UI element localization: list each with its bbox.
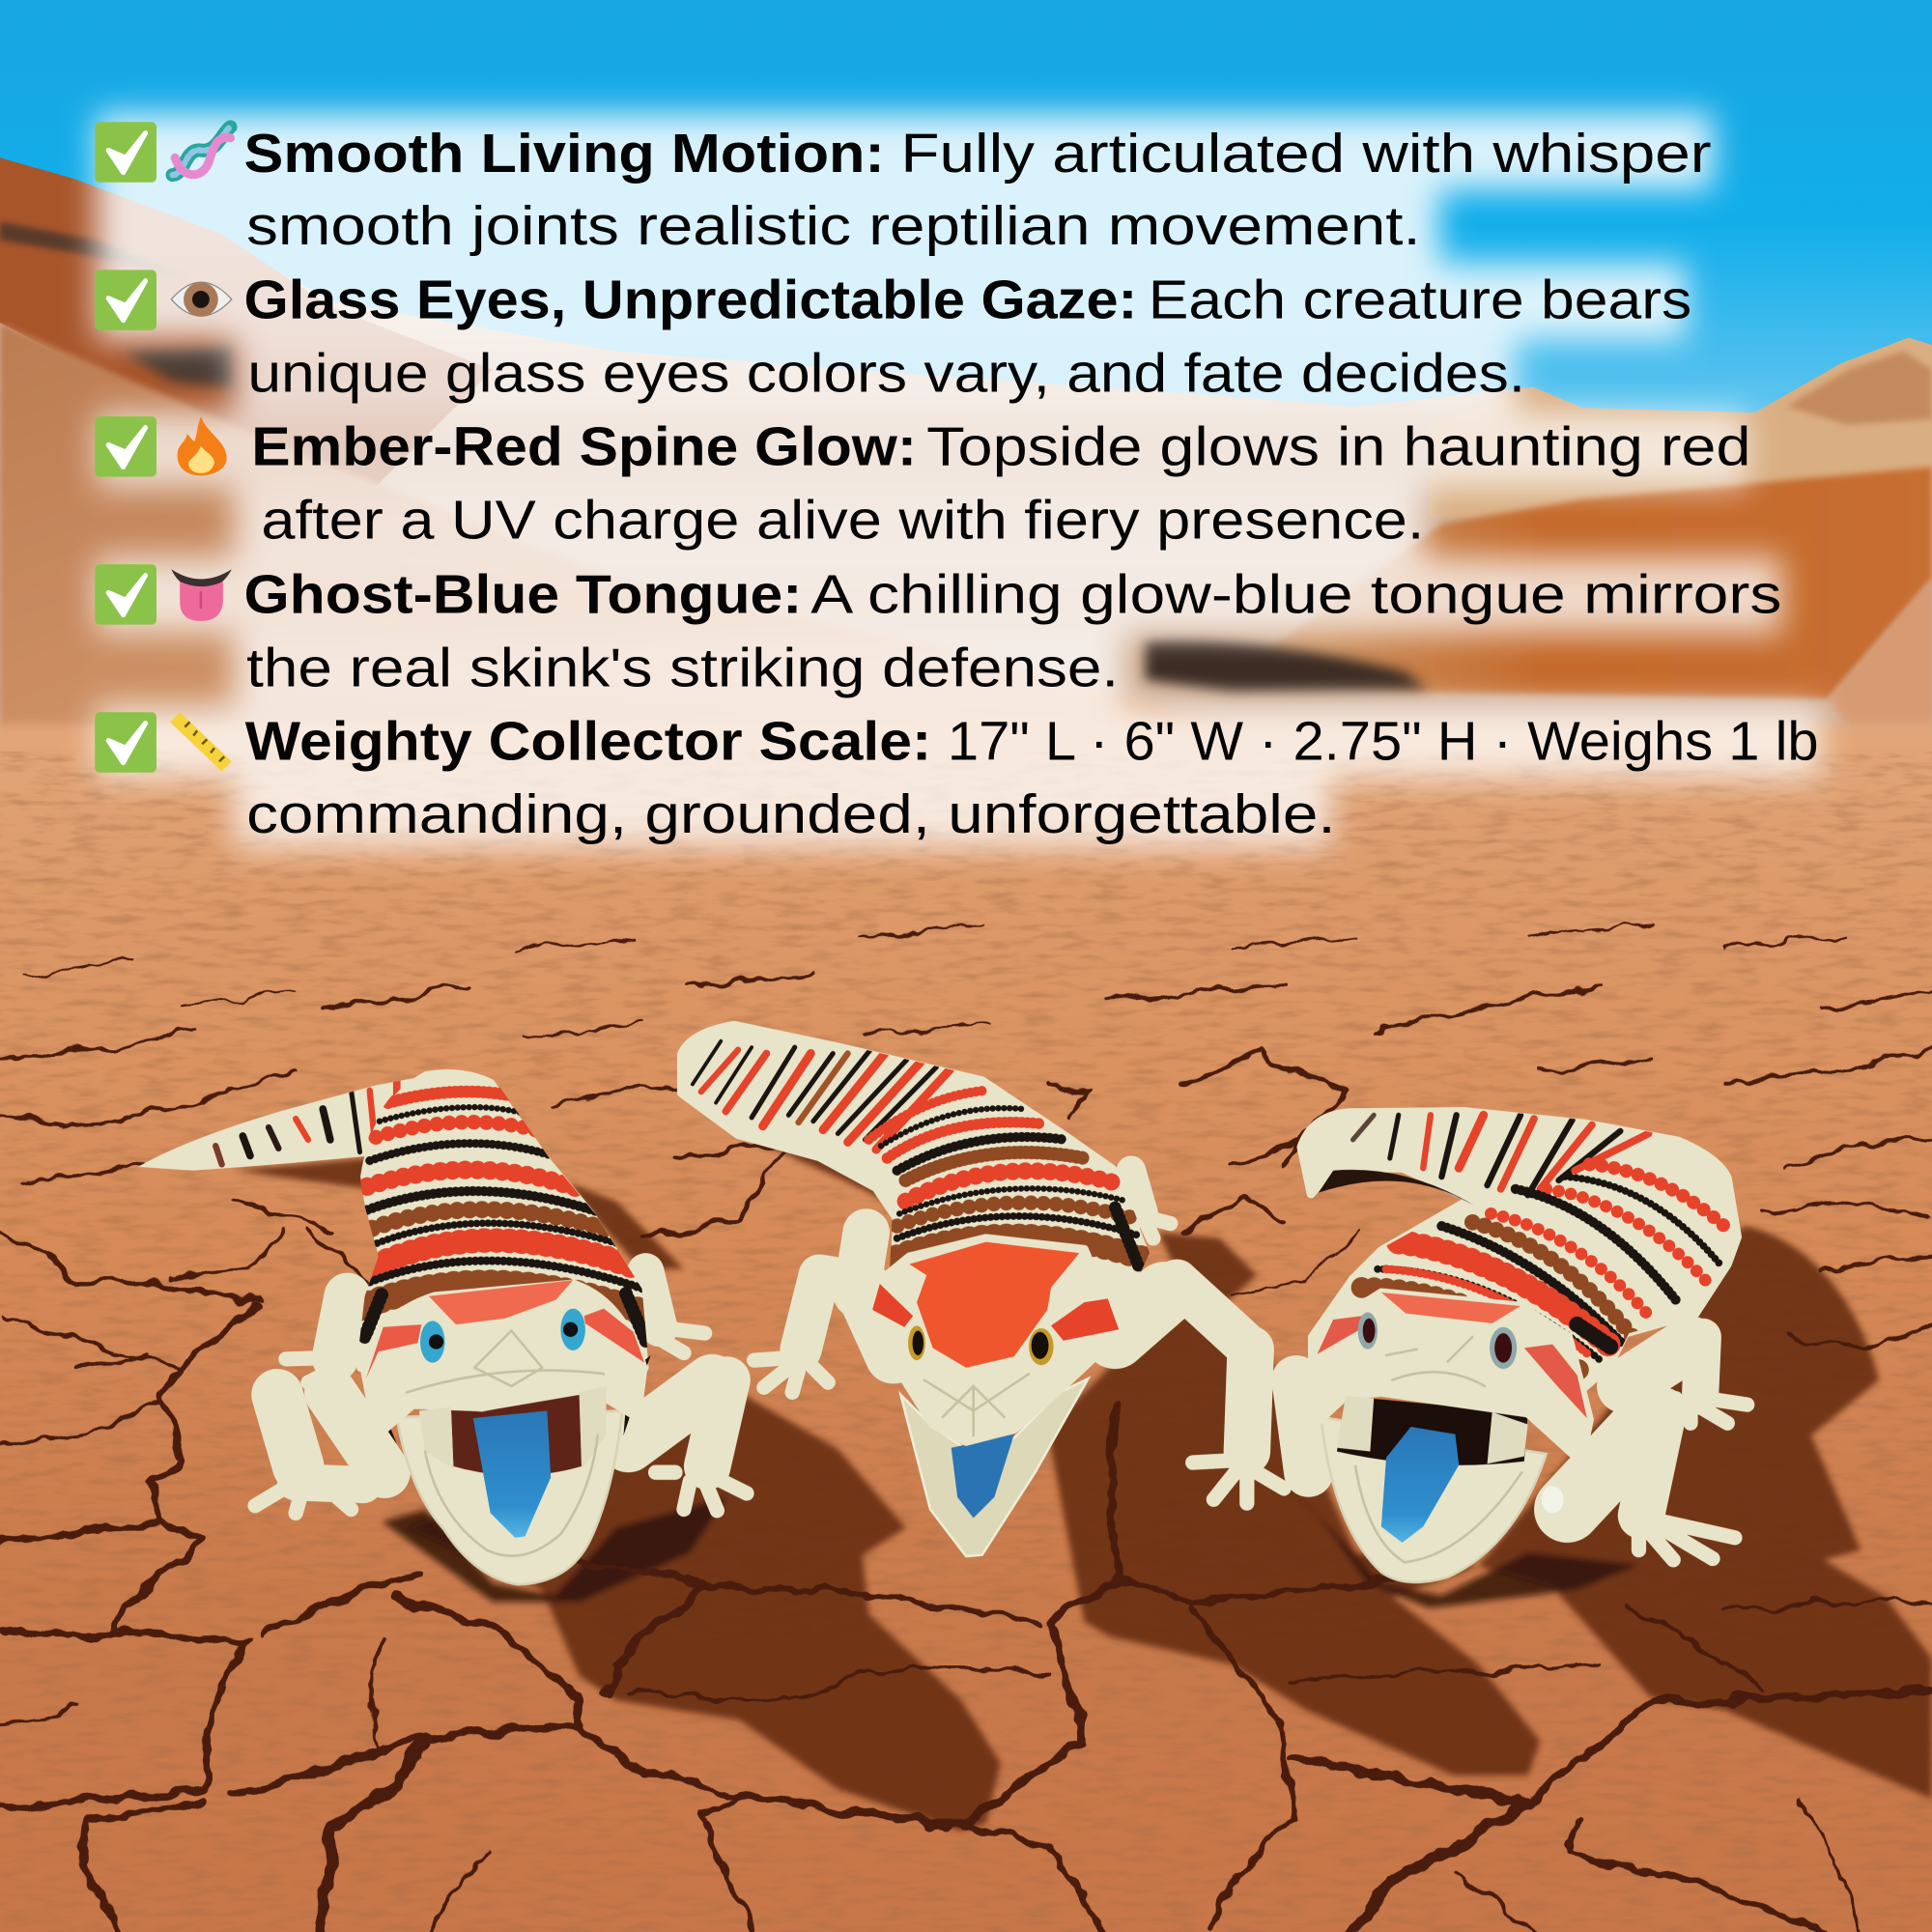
left lizard black gaps beside head <box>367 1355 650 1444</box>
shadow: left lizard tail <box>234 1158 370 1189</box>
heading and text line 3: Each creature bears <box>1149 270 1691 330</box>
middle lizard stripes <box>693 1041 1146 1269</box>
left lizard front-right toes <box>663 1328 705 1353</box>
left lizard forehead patch <box>429 1280 573 1324</box>
item 1: smooth living motion <box>95 122 1712 256</box>
left lizard tail <box>138 1076 426 1182</box>
left lizard rear-right leg <box>629 1382 712 1444</box>
right lizard eyes <box>1358 1312 1517 1369</box>
right cliff rock upper <box>1430 337 1932 518</box>
ground cracks <box>0 924 1932 1932</box>
right cliff lower wedge <box>1829 579 1932 727</box>
shadow: middle lizard <box>1047 1293 1540 1776</box>
item 2: glass eyes <box>95 270 1691 404</box>
middle lizard snout detail <box>924 1374 1029 1435</box>
heading and text line 1: Smooth Living Motion: <box>244 123 885 184</box>
right lizard forehead patch <box>1381 1293 1520 1323</box>
foreground deep cracks <box>0 1309 1932 1932</box>
left lizard jaw inner line <box>425 1435 598 1556</box>
middle lizard eyes <box>908 1325 1054 1365</box>
right lizard snout detail <box>1386 1337 1485 1386</box>
right lizard lower jaw <box>1321 1417 1547 1582</box>
middle lizard back-right leg <box>1131 1171 1144 1213</box>
check icon <box>95 564 156 625</box>
item 3: ember-red spine glow <box>95 416 1751 550</box>
middle lizard right upper arm <box>1177 1282 1251 1350</box>
right lizard left leg <box>1296 1380 1309 1472</box>
left lizard rear-right toes <box>656 1472 747 1511</box>
left lizard cheek stripes <box>366 1309 644 1378</box>
right lizard joint pin <box>1542 1486 1564 1513</box>
check icon <box>95 122 156 183</box>
icon: fire <box>178 416 227 475</box>
heading and text line 1: Fully articulated with whisper <box>900 123 1712 184</box>
middle lizard right shoulder <box>1115 1293 1164 1337</box>
left lizard rear-left thigh <box>330 1392 384 1472</box>
text line 8: the real skink's striking defense. <box>246 637 1119 697</box>
icon: eye <box>171 282 232 317</box>
middle lizard cheek patches <box>872 1284 1119 1341</box>
heading and text line 7 <box>244 564 1781 625</box>
left lizard head <box>365 1284 643 1435</box>
check icon <box>95 712 156 773</box>
check icon <box>95 270 156 330</box>
heading and text line 1 <box>244 123 1712 184</box>
check icon <box>95 416 156 477</box>
shadow: middle lizard arm <box>1158 1233 1257 1324</box>
middle lizard left shoulder <box>863 1288 894 1355</box>
heading and text line 9 <box>245 710 1819 771</box>
fine mid-ground cracks <box>0 924 1932 1932</box>
ground <box>0 724 1932 1932</box>
heading and text line 9: Weighty Collector Scale: <box>245 710 931 771</box>
shadow: left lizard long <box>407 1392 1001 1831</box>
right lizard upper-right shin <box>1700 1337 1703 1392</box>
text line 6: after a UV charge alive with fiery presence. <box>261 489 1424 550</box>
text line 2: smooth joints realistic reptilian movement. <box>246 195 1421 256</box>
heading and text line 3: Glass Eyes, Unpredictable Gaze: <box>244 270 1137 330</box>
shadow: lizard overlap <box>1269 1466 1479 1597</box>
lizard shadows <box>234 1127 1932 1831</box>
lizard: left <box>138 1074 747 1584</box>
right lizard head <box>1312 1293 1589 1462</box>
left lizard rear-left leg <box>277 1395 298 1466</box>
left lizard rear-right shin <box>707 1380 727 1466</box>
shadow: left lizard upper <box>569 1182 684 1269</box>
right lizard lower-right shin <box>1641 1410 1663 1516</box>
heading and text line 5 <box>251 416 1750 477</box>
middle lizard right toes <box>1193 1460 1284 1503</box>
right cliff orange face <box>1233 467 1932 698</box>
middle lizard left upper arm <box>856 1233 867 1293</box>
left dune <box>0 323 1233 788</box>
middle lizard tail and body <box>681 1025 1145 1302</box>
left lizard front-left leg <box>335 1296 348 1358</box>
middle lizard left toes <box>754 1358 828 1392</box>
left cliff dark streak <box>0 222 185 277</box>
left lizard mouth interior <box>451 1390 582 1475</box>
right lizard mouth interior <box>1337 1396 1528 1465</box>
contact shadow: left jaw <box>382 1497 727 1602</box>
text haze panel <box>96 113 1821 848</box>
checklist text and icons <box>95 122 1819 844</box>
item 5: weighty collector scale <box>95 710 1819 844</box>
left lizard tail stripes <box>215 1078 397 1164</box>
shadow: middle tail <box>727 1127 906 1213</box>
heading and text line 5: Topside glows in haunting red <box>926 416 1750 477</box>
text line 10: commanding, grounded, unforgettable. <box>246 783 1336 844</box>
cliff shadow at base <box>1145 639 1428 693</box>
left lizard mouth pads <box>419 1386 607 1468</box>
heading and text line 7: A chilling glow-blue tongue mirrors <box>810 564 1781 625</box>
right lizard upper-right leg <box>1624 1343 1690 1386</box>
heading and text line 5: Ember-Red Spine Glow: <box>251 416 917 477</box>
right lizard mouth pads <box>1337 1396 1528 1463</box>
sky <box>0 0 1932 739</box>
contact shadow: right jaw <box>1319 1516 1638 1608</box>
lizard: middle <box>681 1025 1284 1556</box>
right lizard lower-right leg <box>1567 1419 1651 1509</box>
right lizard right toes <box>1638 1521 1735 1560</box>
left lizard eyes <box>420 1309 585 1363</box>
left shadow smudge <box>124 345 234 388</box>
rock arch highlight <box>1786 352 1932 425</box>
shadow: right lizard <box>1479 1226 1932 1799</box>
heading and text line 9: 17" L · 6" W · 2.75" H · Weighs 1 lb <box>948 710 1819 771</box>
right lizard jaw inner line <box>1355 1466 1521 1562</box>
left lizard front-left foot <box>286 1358 332 1382</box>
right lizard cheek patches <box>1318 1316 1587 1418</box>
left lizard lower jaw <box>397 1410 622 1584</box>
icon: tongue <box>171 569 232 621</box>
left lizard rear-left foot <box>296 1482 363 1485</box>
icon: ruler <box>170 712 232 771</box>
left lizard rear-left toes <box>255 1488 352 1513</box>
right lizard upper-right toes <box>1658 1399 1747 1423</box>
right lizard tail tip shadow <box>1319 1170 1474 1205</box>
heading and text line 3 <box>244 270 1691 330</box>
left lizard snout detail <box>407 1331 604 1392</box>
middle lizard right forearm <box>1247 1350 1251 1452</box>
right lizard tail and body <box>1301 1112 1737 1405</box>
middle lizard forehead patch <box>909 1242 1079 1368</box>
right lizard stripes <box>1353 1115 1731 1374</box>
middle lizard head <box>876 1238 1120 1441</box>
right lizard tongue <box>1381 1427 1459 1543</box>
far cliff band <box>0 241 1932 739</box>
left cliff <box>0 157 493 493</box>
left lizard body <box>361 1074 644 1368</box>
middle lizard left forearm <box>801 1275 856 1350</box>
item 4: ghost-blue tongue <box>95 564 1781 697</box>
middle lizard lower jaw <box>900 1378 1088 1556</box>
lizard: right <box>1296 1112 1747 1582</box>
left lizard tongue <box>473 1410 551 1538</box>
middle lizard back-right toes <box>1146 1217 1171 1238</box>
middle lizard tongue <box>952 1435 1014 1518</box>
heading and text line 7: Ghost-Blue Tongue: <box>244 564 802 625</box>
text line 4: unique glass eyes colors vary, and fate decides. <box>247 343 1525 404</box>
left lizard body stripes <box>357 1092 653 1343</box>
ground texture <box>0 752 1932 1932</box>
icon: dna <box>173 127 231 175</box>
left lizard front-right leg <box>645 1271 659 1328</box>
